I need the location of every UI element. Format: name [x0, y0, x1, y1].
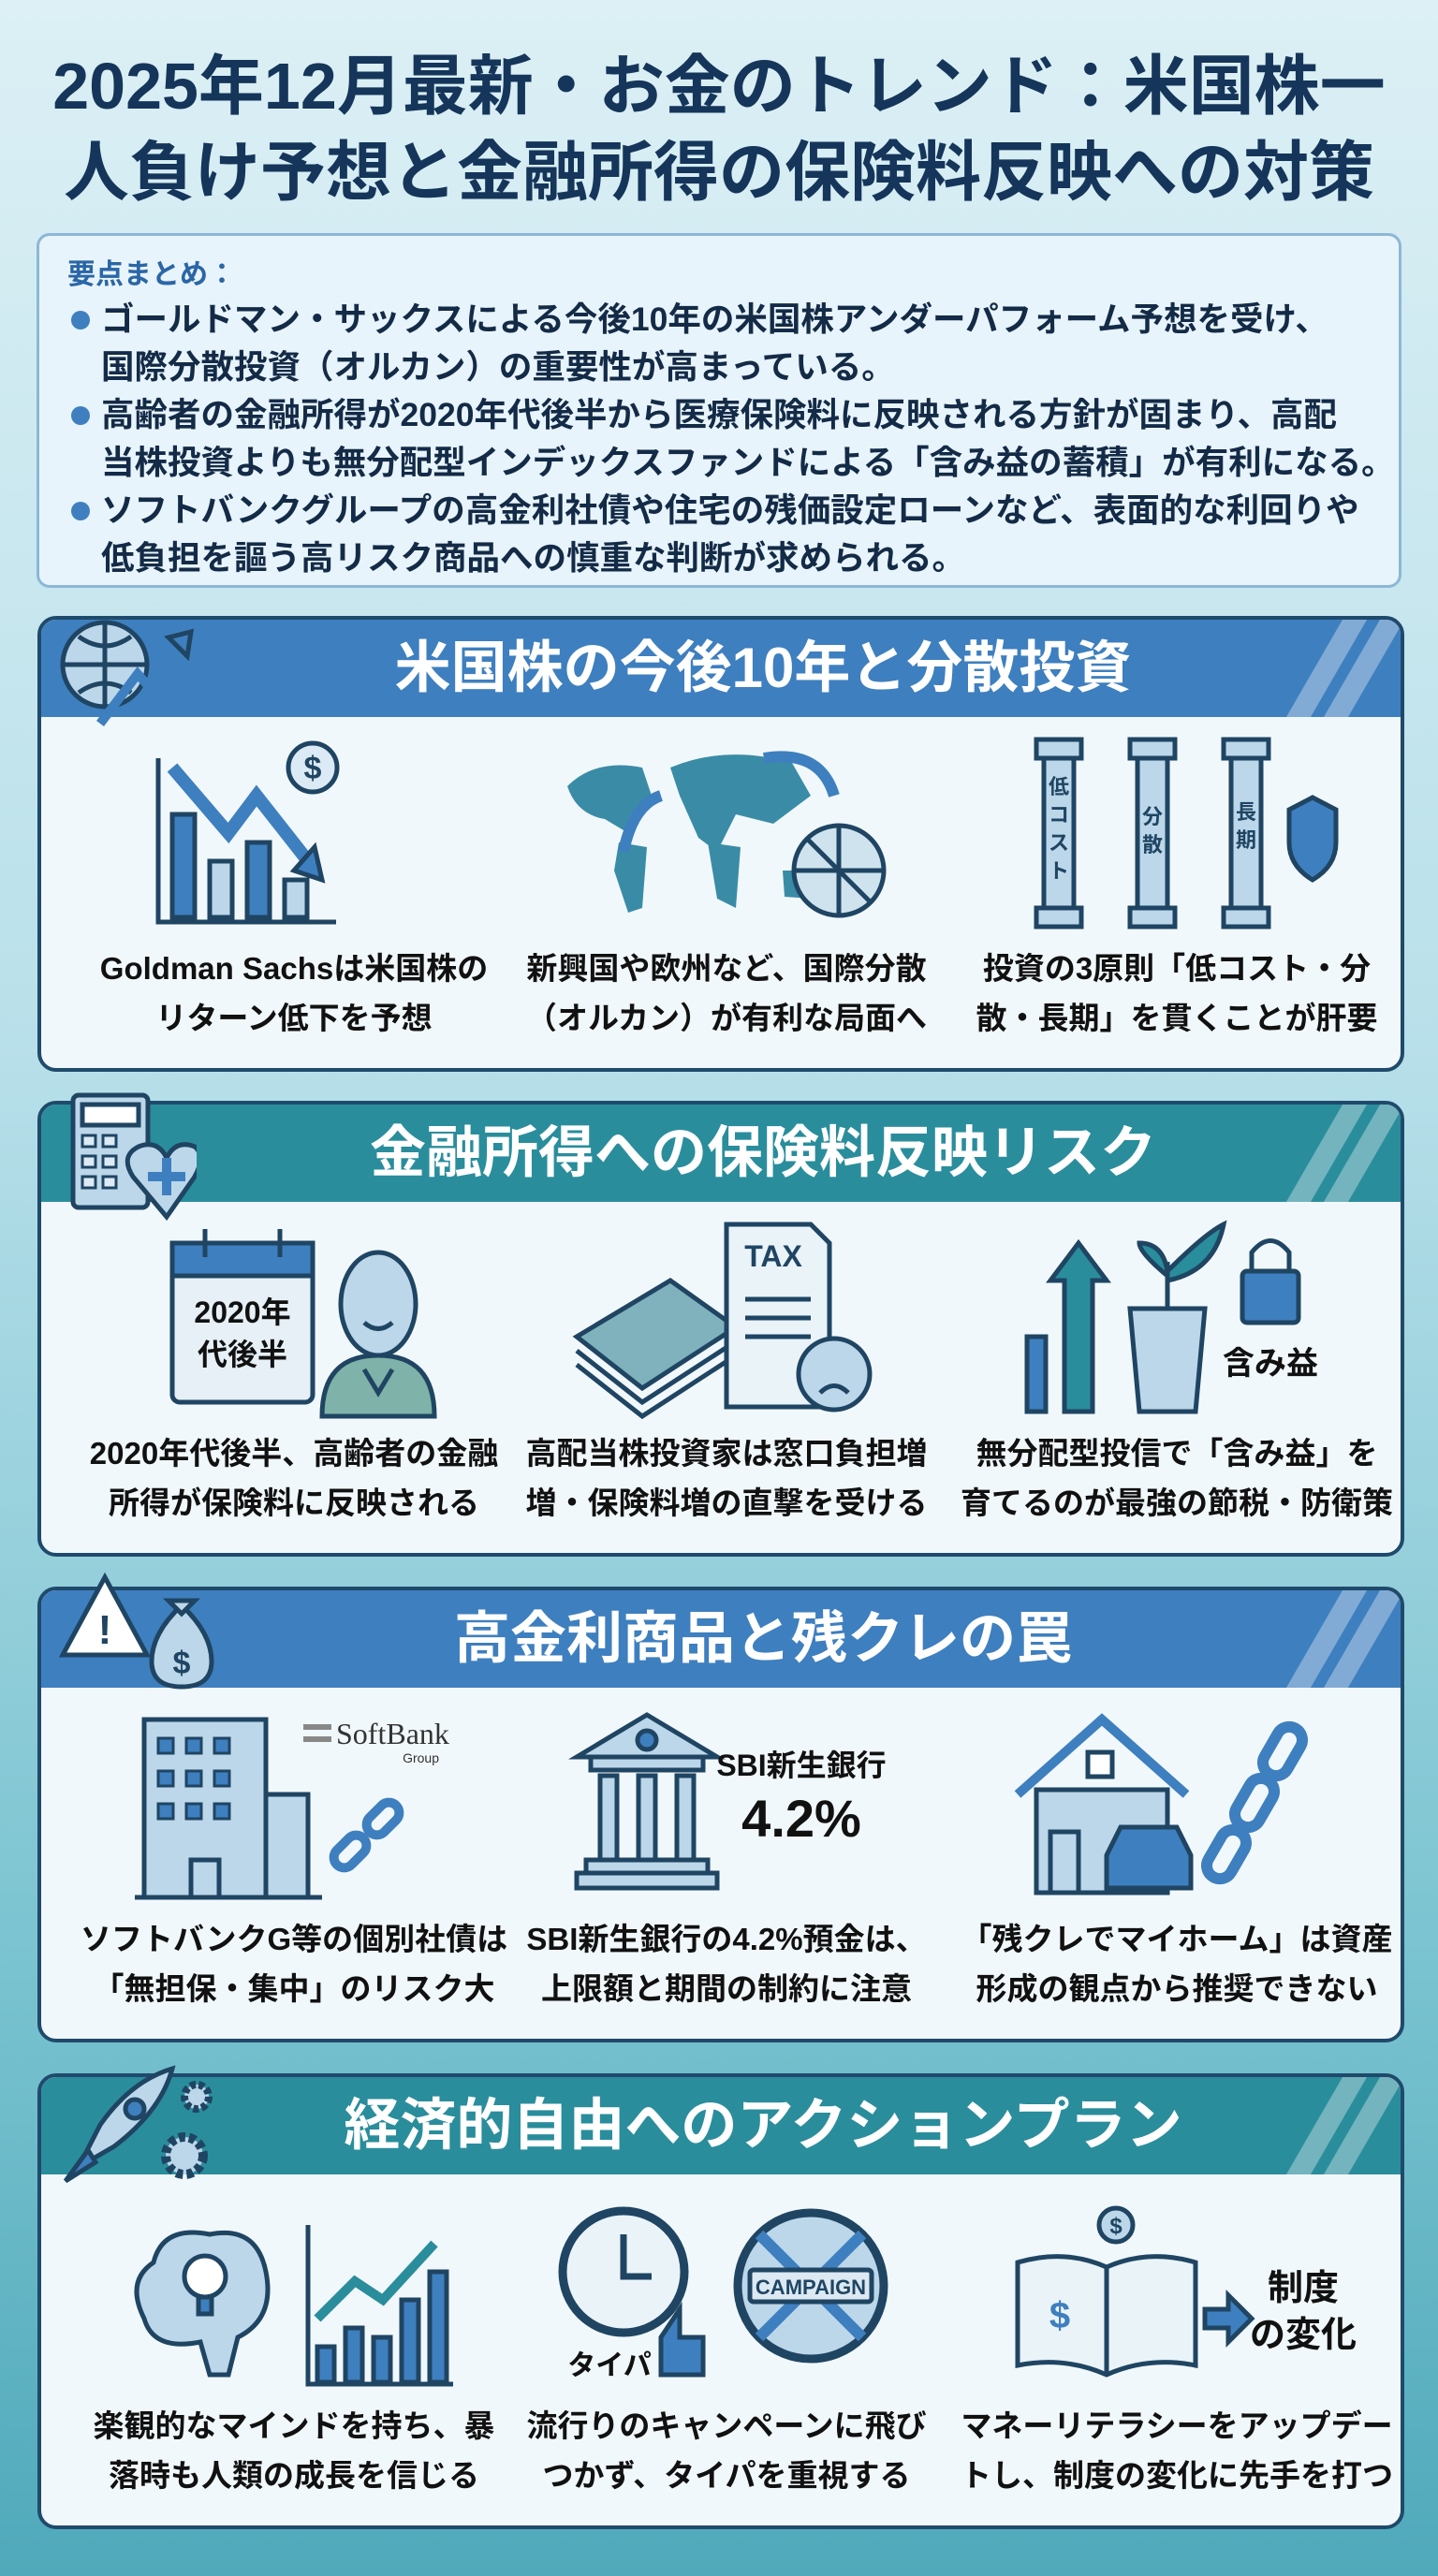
summary box: 国際分散投資（オルカン）の重要性が高まっている。 — [101, 348, 895, 386]
icon: calculator and heart — [71, 1093, 197, 1221]
item: Goldman Sachs: $ — [304, 751, 322, 786]
icon: globe with arrow — [60, 620, 194, 726]
item: unrealized gains — [961, 1221, 1393, 1520]
item: three principles: ト — [1049, 859, 1069, 883]
summary box: ソフトバンクグループの高金利社債や住宅の残価設定ローンなど、表面的な利回りや — [101, 491, 1359, 529]
item: optimistic mind — [94, 2225, 494, 2493]
item: calendar and elder: 代後半 — [198, 1338, 287, 1371]
summary box: 要点まとめ： — [67, 259, 236, 290]
header: high-yield traps — [41, 1590, 1401, 1688]
header: action plan: 経済的自由へのアクションプラン — [344, 2094, 1182, 2157]
item: optimistic mind: 落時も人類の成長を信じる — [109, 2458, 479, 2493]
header: insurance risk: 金融所得への保険料反映リスク — [370, 1121, 1156, 1184]
item: three principles: 散・長期」を貫くことが肝要 — [976, 1001, 1378, 1035]
item: time performance: CAMPAIGN — [756, 2276, 866, 2299]
item: money literacy: トし、制度の変化に先手を打つ — [961, 2458, 1393, 2493]
item: SoftBank bonds: SoftBank — [336, 1717, 449, 1750]
header: US stocks — [41, 620, 1401, 717]
panel: US stocks — [37, 616, 1404, 1072]
summary box — [37, 233, 1401, 588]
item: world diversification: （オルカン）が有利な局面へ — [526, 1001, 927, 1035]
item: three principles: ス — [1049, 831, 1069, 855]
item: money literacy: 制度 — [1268, 2269, 1339, 2308]
item: SoftBank bonds: Group — [403, 1750, 439, 1765]
item: world diversification: 新興国や欧州など、国際分散 — [526, 951, 927, 986]
item: money literacy: $ — [1109, 2214, 1123, 2239]
summary box: 当株投資よりも無分配型インデックスファンドによる「含み益の蓄積」が有利になる。 — [101, 444, 1395, 481]
item: Goldman Sachs: リターン低下を予想 — [155, 1001, 433, 1035]
item: residual-value loan home: 「残クレでマイホーム」は資産 — [961, 1922, 1393, 1956]
item: Goldman Sachs: Goldman Sachsは米国株の — [100, 951, 488, 986]
title: 2025年12月最新・お金のトレンド：米国株一 — [52, 50, 1386, 123]
item: unrealized gains: 含み益 — [1223, 1346, 1318, 1382]
panel: insurance risk — [37, 1101, 1404, 1557]
summary box: 高齢者の金融所得が2020年代後半から医療保険料に反映される方針が固まり、高配 — [101, 396, 1337, 433]
item: SBI deposit: SBI新生銀行の4.2%預金は、 — [526, 1922, 927, 1956]
icon: warning and money bag: $ — [173, 1646, 191, 1681]
item: SBI deposit — [526, 1712, 927, 2006]
panel: high-yield traps — [37, 1587, 1404, 2042]
item: SoftBank bonds: 「無担保・集中」のリスク大 — [94, 1971, 494, 2006]
item: money literacy — [961, 2205, 1393, 2493]
item: SBI deposit: SBI新生銀行 — [716, 1749, 887, 1782]
header: US stocks: 米国株の今後10年と分散投資 — [395, 637, 1131, 699]
summary box: ゴールドマン・サックスによる今後10年の米国株アンダーパフォーム予想を受け、 — [101, 300, 1328, 338]
item: SoftBank bonds — [81, 1717, 507, 2006]
item: three principles: 投資の3原則「低コスト・分 — [983, 951, 1371, 986]
item: money literacy: の変化 — [1250, 2316, 1357, 2355]
item: three principles: 長 — [1236, 800, 1256, 824]
icon: warning and money bag — [58, 1573, 213, 1689]
item: three principles: 期 — [1236, 828, 1256, 852]
item: dividends and tax: 高配当株投資家は窓口負担増 — [526, 1436, 927, 1471]
item: residual-value loan home: 形成の観点から推奨できない — [976, 1971, 1378, 2006]
panel: action plan — [37, 2073, 1404, 2529]
item: calendar and elder: 2020年代後半、高齢者の金融 — [90, 1436, 498, 1471]
item: calendar and elder — [90, 1229, 498, 1520]
item: three principles: 散 — [1142, 833, 1163, 856]
item: world diversification — [526, 751, 927, 1035]
item: three principles: 低 — [1049, 775, 1069, 798]
item: dividends and tax — [526, 1222, 927, 1520]
item: time performance: つかず、タイパを重視する — [542, 2458, 911, 2493]
title — [52, 50, 1386, 209]
header: insurance risk — [41, 1105, 1401, 1202]
summary box: 低負担を謳う高リスク商品への慎重な判断が求められる。 — [101, 539, 965, 577]
item: dividends and tax: 増・保険料増の直撃を受ける — [526, 1486, 927, 1520]
item: SBI deposit: 4.2% — [741, 1789, 861, 1848]
item: money literacy: $ — [1049, 2295, 1070, 2336]
title: 人負け予想と金融所得の保険料反映への対策 — [64, 136, 1374, 209]
item: optimistic mind: 楽観的なマインドを持ち、暴 — [94, 2408, 494, 2443]
header: high-yield traps: 高金利商品と残クレの罠 — [454, 1607, 1072, 1670]
item: time performance — [526, 2207, 927, 2493]
item: money literacy: マネーリテラシーをアップデー — [961, 2408, 1393, 2443]
item: unrealized gains: 無分配型投信で「含み益」を — [976, 1436, 1378, 1471]
item: calendar and elder: 所得が保険料に反映される — [109, 1486, 479, 1520]
item: SBI deposit: 上限額と期間の制約に注意 — [541, 1971, 912, 2006]
item: time performance: 流行りのキャンペーンに飛び — [526, 2408, 927, 2443]
item: calendar and elder: 2020年 — [194, 1295, 291, 1329]
item: unrealized gains: 育てるのが最強の節税・防衛策 — [961, 1486, 1393, 1520]
item: residual-value loan home — [961, 1713, 1393, 2006]
item: time performance: タイパ — [567, 2350, 652, 2381]
item: three principles — [976, 738, 1378, 1035]
icon: rocket and gears — [64, 2065, 213, 2183]
item: Goldman Sachs — [100, 741, 488, 1035]
item: three principles: 分 — [1142, 805, 1163, 828]
item: SoftBank bonds: ソフトバンクG等の個別社債は — [81, 1922, 507, 1956]
item: three principles: コ — [1049, 803, 1069, 827]
item: dividends and tax: TAX — [744, 1239, 802, 1273]
header: action plan — [41, 2077, 1401, 2174]
icon: warning and money bag: ! — [98, 1607, 111, 1653]
